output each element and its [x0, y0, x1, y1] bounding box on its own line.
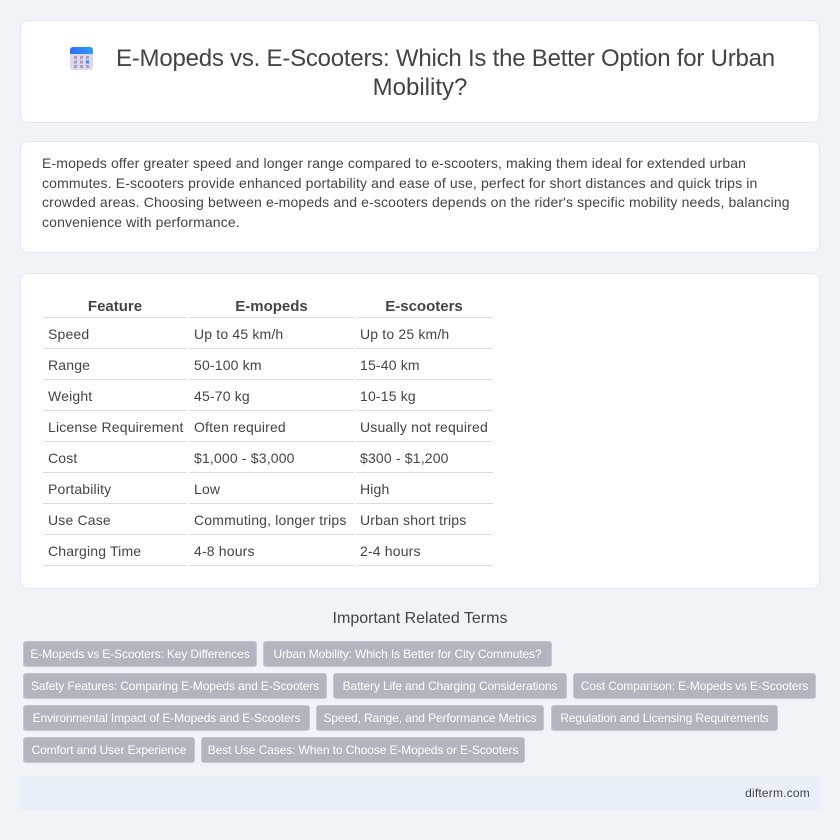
table row: speed: Speed: [48, 326, 89, 342]
tag: [573, 673, 816, 699]
title: Mobility?: [373, 74, 467, 101]
tag: Comfort and User Experience: [32, 743, 186, 757]
tag: Safety Features: Comparing E-Mopeds and E-Scooters: [31, 679, 319, 693]
table row: license requirement: Often required: [194, 419, 286, 435]
title: E-Mopeds vs. E-Scooters: Which Is the Better Option for Urban: [116, 45, 775, 72]
title: [116, 45, 775, 101]
table row: portability: Portability: [48, 481, 111, 497]
table row: license requirement: License Requirement: [48, 419, 184, 435]
footer bar: [20, 776, 820, 810]
table row: cost: $300 - $1,200: [360, 450, 449, 466]
table row: range: 50-100 km: [194, 357, 262, 373]
table row: weight: Weight: [48, 388, 92, 404]
icon: calendar: [70, 47, 93, 70]
table row: range: [48, 357, 420, 373]
tag: [23, 641, 257, 667]
tag: Best Use Cases: When to Choose E-Mopeds or E-Scooters: [208, 743, 518, 757]
summary text: [42, 155, 790, 230]
panel: title card: [20, 20, 820, 123]
table row: cost: [48, 450, 449, 466]
table row: speed: [48, 326, 449, 342]
table row: portability: Low: [194, 481, 220, 497]
table row: speed: Up to 25 km/h: [360, 326, 449, 342]
table row: range: 15-40 km: [360, 357, 420, 373]
table row: charging time: [48, 543, 421, 559]
summary text: E-mopeds offer greater speed and longer range compared to e-scooters, making them ideal for extended urban: [42, 155, 746, 171]
table row: charging time: 4-8 hours: [194, 543, 255, 559]
tag: [23, 705, 310, 731]
tag: Speed, Range, and Performance Metrics: [323, 711, 536, 725]
table row: use case: [48, 512, 466, 528]
tag: Urban Mobility: Which Is Better for City Commutes?: [273, 647, 542, 661]
tag: [23, 737, 195, 763]
table row: portability: High: [360, 481, 389, 497]
heading: important related terms: Important Related Terms: [333, 610, 507, 627]
table row: weight: [48, 388, 416, 404]
tag: [23, 673, 327, 699]
table header: [88, 298, 463, 315]
table header: Feature: [88, 298, 142, 315]
tag: [201, 737, 525, 763]
tag: E-Mopeds vs E-Scooters: Key Differences: [30, 647, 250, 661]
table row: weight: 10-15 kg: [360, 388, 416, 404]
table row: portability: [48, 481, 389, 497]
summary text: convenience with performance.: [42, 214, 240, 230]
tag: Battery Life and Charging Considerations: [343, 679, 557, 693]
tag: [333, 673, 567, 699]
tag: [316, 705, 544, 731]
tag: Cost Comparison: E-Mopeds vs E-Scooters: [581, 679, 808, 693]
table row: charging time: 2-4 hours: [360, 543, 421, 559]
table row: range: Range: [48, 357, 90, 373]
table row: weight: 45-70 kg: [194, 388, 250, 404]
panel: summary: [20, 141, 820, 253]
tag: [551, 705, 778, 731]
table row: license requirement: Usually not required: [360, 419, 488, 435]
table row: license requirement: [48, 419, 488, 435]
summary text: crowded areas. Choosing between e-mopeds and e-scooters depends on the rider's specific mobility needs, balancing: [42, 194, 790, 210]
table header: E-scooters: [385, 298, 463, 315]
table row: use case: Urban short trips: [360, 512, 466, 528]
table row: charging time: Charging Time: [48, 543, 141, 559]
tag group: related terms: [23, 641, 816, 763]
table row: cost: $1,000 - $3,000: [194, 450, 295, 466]
tag: Environmental Impact of E-Mopeds and E-Scooters: [33, 711, 300, 725]
footer text: difterm.com: [745, 786, 810, 800]
tag: [263, 641, 552, 667]
table header: E-mopeds: [235, 298, 308, 315]
summary text: commutes. E-scooters provide enhanced portability and ease of use, perfect for short distances and quick trips in: [42, 174, 757, 190]
table row: use case: Commuting, longer trips: [194, 512, 347, 528]
panel: comparison table: [20, 273, 820, 589]
table row: speed: Up to 45 km/h: [194, 326, 283, 342]
table row: cost: Cost: [48, 450, 77, 466]
tag: Regulation and Licensing Requirements: [560, 711, 769, 725]
table row: use case: Use Case: [48, 512, 111, 528]
